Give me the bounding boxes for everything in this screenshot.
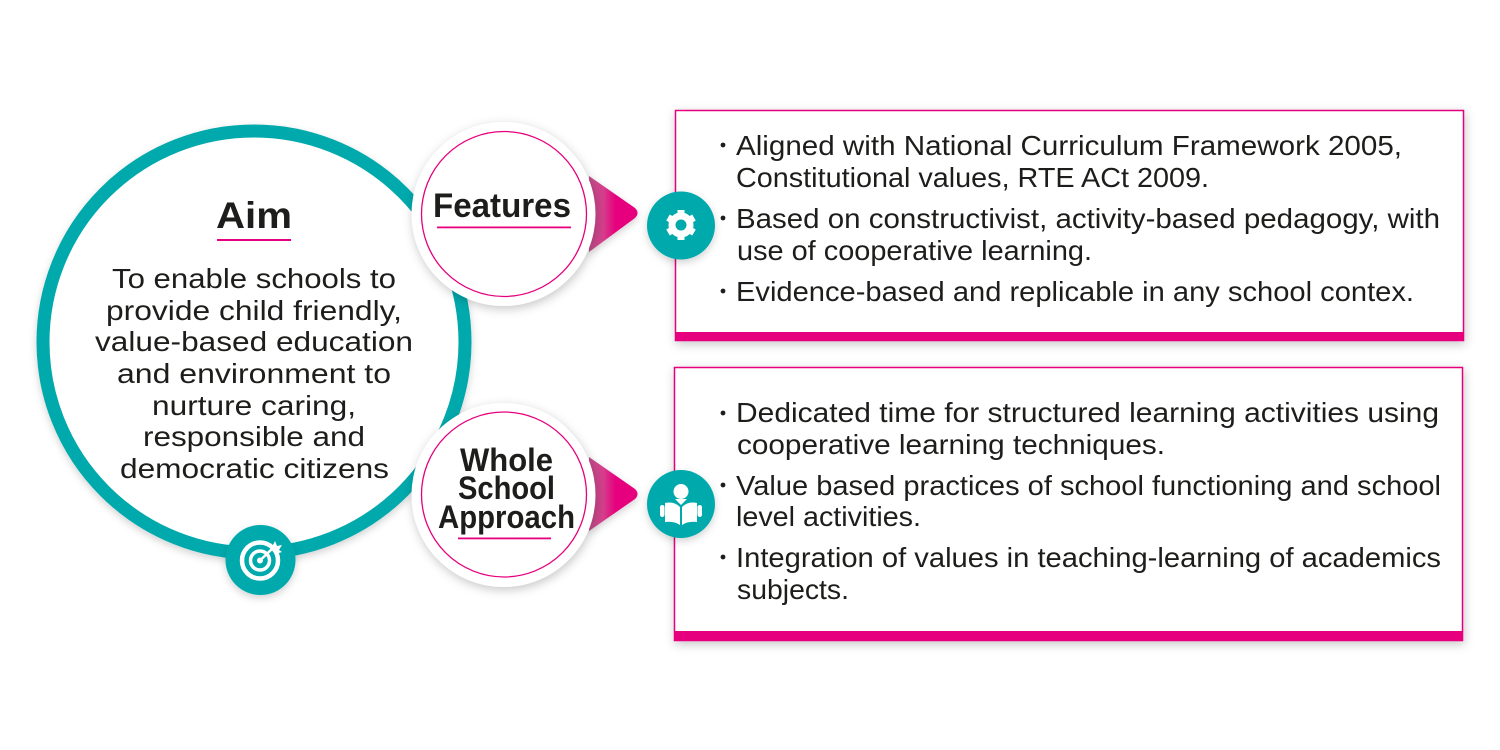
panel: features box — [675, 110, 1464, 341]
badge: whole school approach — [412, 403, 596, 587]
features list: Based on constructivist, activity-based pedagogy, with — [736, 203, 1440, 234]
aim text: democratic citizens — [120, 453, 389, 484]
badge: features: Features — [433, 187, 571, 225]
aim text: value-based education — [95, 326, 413, 357]
arrow: features pointer — [589, 176, 638, 252]
panel: whole school approach box — [674, 368, 1463, 641]
whole school approach list — [721, 397, 1441, 605]
icon: target — [226, 525, 296, 595]
aim text: responsible and — [143, 421, 365, 452]
badge: features — [412, 122, 596, 306]
features list: Constitutional values, RTE ACt 2009. — [736, 162, 1209, 193]
whole school approach list: subjects. — [737, 574, 849, 605]
badge: whole school approach: Approach — [438, 499, 575, 535]
aim text: and environment to — [117, 358, 391, 389]
icon: reader with book — [647, 470, 715, 538]
features list: Evidence-based and replicable in any school contex. — [736, 276, 1414, 307]
whole school approach list: level activities. — [736, 501, 921, 532]
whole school approach list: Dedicated time for structured learning activities using — [736, 397, 1439, 428]
features list: Aligned with National Curriculum Framework 2005, — [736, 130, 1402, 161]
aim text: To enable schools to — [112, 263, 396, 294]
features list: use of cooperative learning. — [737, 235, 1092, 266]
features list — [721, 130, 1440, 307]
aim text: nurture caring, — [152, 390, 356, 421]
whole school approach list: Value based practices of school functioning and school — [736, 470, 1441, 501]
aim text: provide child friendly, — [106, 295, 402, 326]
badge: whole school approach: School — [458, 470, 555, 506]
panel: aim circle — [43, 131, 465, 595]
aim heading: Aim — [216, 195, 292, 236]
whole school approach list: cooperative learning techniques. — [737, 429, 1165, 460]
icon: gear — [647, 192, 715, 260]
aim text — [95, 263, 413, 484]
badge: whole school approach: Whole — [460, 442, 553, 478]
whole school approach list: Integration of values in teaching-learning of academics — [736, 542, 1441, 573]
arrow: whole school pointer — [589, 457, 638, 531]
